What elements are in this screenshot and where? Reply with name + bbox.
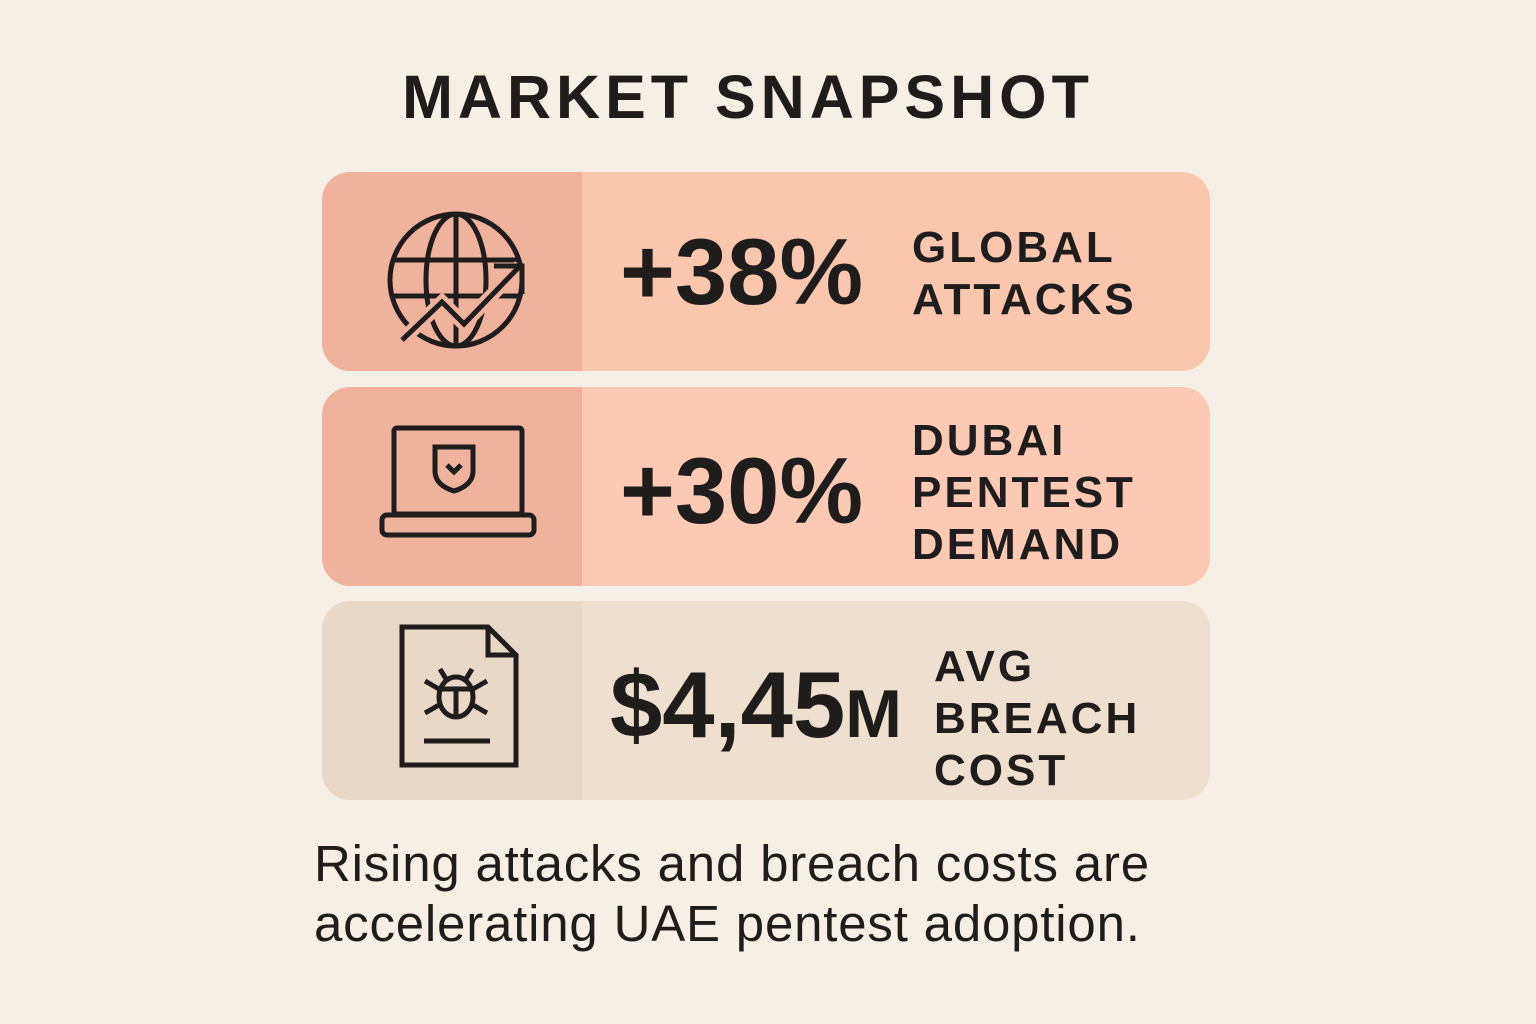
label: PENTEST bbox=[912, 468, 1136, 517]
icon: laptop with shield bbox=[380, 426, 536, 538]
icon: document with bug bbox=[400, 624, 518, 768]
label bbox=[934, 642, 1140, 795]
stat: +38% bbox=[620, 219, 863, 324]
label: AVG bbox=[934, 642, 1035, 691]
label bbox=[912, 223, 1137, 324]
icon: globe with trend arrow bbox=[388, 212, 524, 348]
stat: $4,45M bbox=[610, 652, 902, 757]
label: GLOBAL bbox=[912, 223, 1116, 272]
panel: dubai pentest demand bbox=[322, 387, 1210, 586]
footer text: accelerating UAE pentest adoption. bbox=[314, 895, 1141, 952]
footer text bbox=[314, 835, 1150, 952]
panel: global attacks bbox=[322, 172, 1210, 371]
title: MARKET SNAPSHOT bbox=[402, 63, 1094, 131]
label: DEMAND bbox=[912, 520, 1123, 569]
label: COST bbox=[934, 746, 1068, 795]
label bbox=[912, 416, 1136, 569]
label: DUBAI bbox=[912, 416, 1066, 465]
stat: +30% bbox=[620, 438, 863, 543]
panel: avg breach cost bbox=[322, 601, 1210, 800]
footer text: Rising attacks and breach costs are bbox=[314, 835, 1150, 892]
label: BREACH bbox=[934, 694, 1140, 743]
label: ATTACKS bbox=[912, 275, 1137, 324]
